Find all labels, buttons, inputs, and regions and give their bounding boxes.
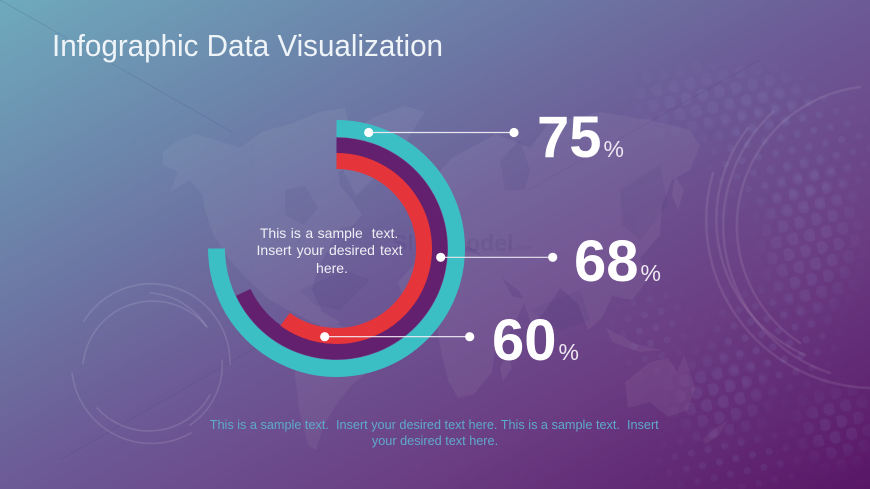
connector: 60% xyxy=(320,332,474,341)
madagascar xyxy=(500,352,512,381)
center text block: This is a sample text. xyxy=(260,225,398,241)
center text block: here. xyxy=(316,260,348,276)
south america xyxy=(295,322,378,450)
world map xyxy=(163,106,728,450)
decorative circle: right xyxy=(706,87,870,388)
north america xyxy=(163,108,362,330)
halftone dot texture xyxy=(638,92,862,479)
value: 75 percent: 75% xyxy=(537,105,624,170)
watermark: SlideModel xyxy=(392,230,513,256)
ring: 75% cyan xyxy=(216,128,456,368)
value: 60 percent: 60% xyxy=(492,308,579,373)
footer text block: your desired text here. xyxy=(372,434,498,448)
center text block: Insert your desired text xyxy=(257,242,403,258)
connector: 75% xyxy=(364,128,519,137)
africa xyxy=(398,250,526,398)
ring: 60% red xyxy=(285,161,424,336)
eurasia xyxy=(422,112,700,330)
ring: 68% purple xyxy=(243,146,439,352)
footer text block: This is a sample text. Insert your desired text here. This is a sample text. Insert xyxy=(210,418,659,432)
connector: 68% xyxy=(436,253,557,262)
greenland xyxy=(344,106,425,196)
australia xyxy=(625,355,695,417)
watermark: .com xyxy=(513,243,532,252)
islands of japan xyxy=(672,176,684,210)
decorative circle: left xyxy=(72,284,230,443)
value: 68 percent: 68% xyxy=(574,229,661,294)
indonesia xyxy=(606,328,662,352)
title: Infographic Data Visualization xyxy=(52,29,443,63)
map dark sea shading xyxy=(285,140,668,330)
new zealand xyxy=(702,420,728,444)
radial progress chart xyxy=(216,128,456,368)
